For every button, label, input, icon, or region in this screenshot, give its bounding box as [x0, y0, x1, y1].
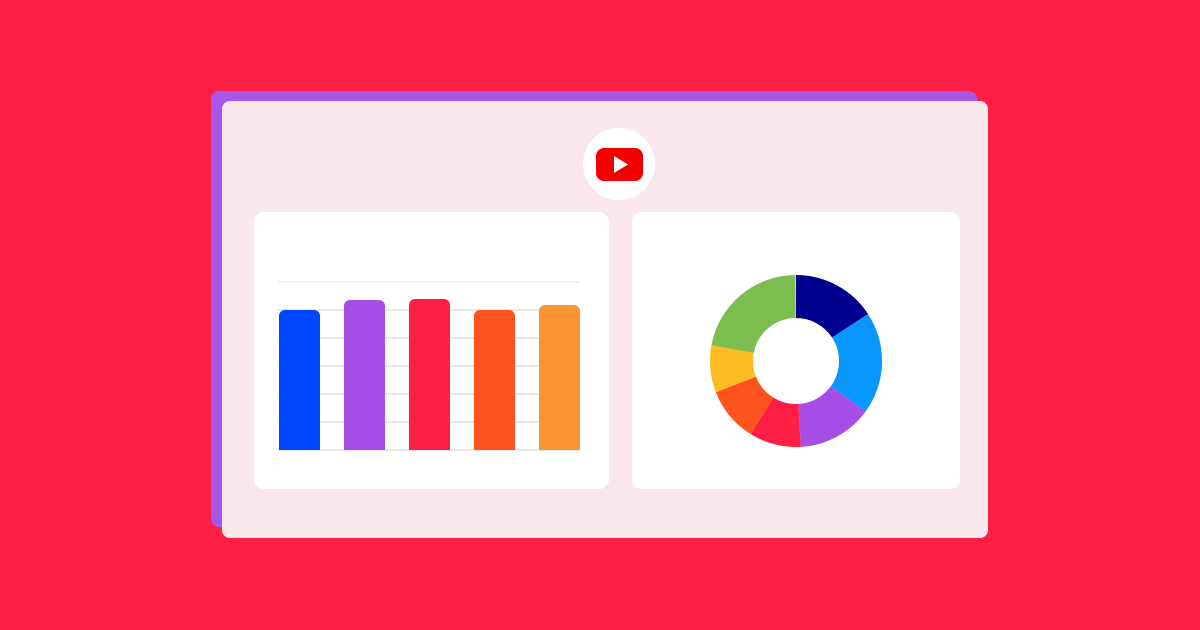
back card: purple — [211, 91, 977, 527]
icon: youtube logo — [583, 128, 655, 200]
main card — [222, 101, 988, 538]
bars — [279, 299, 580, 450]
panel: bar chart — [254, 212, 609, 489]
panel: donut chart — [632, 212, 960, 489]
